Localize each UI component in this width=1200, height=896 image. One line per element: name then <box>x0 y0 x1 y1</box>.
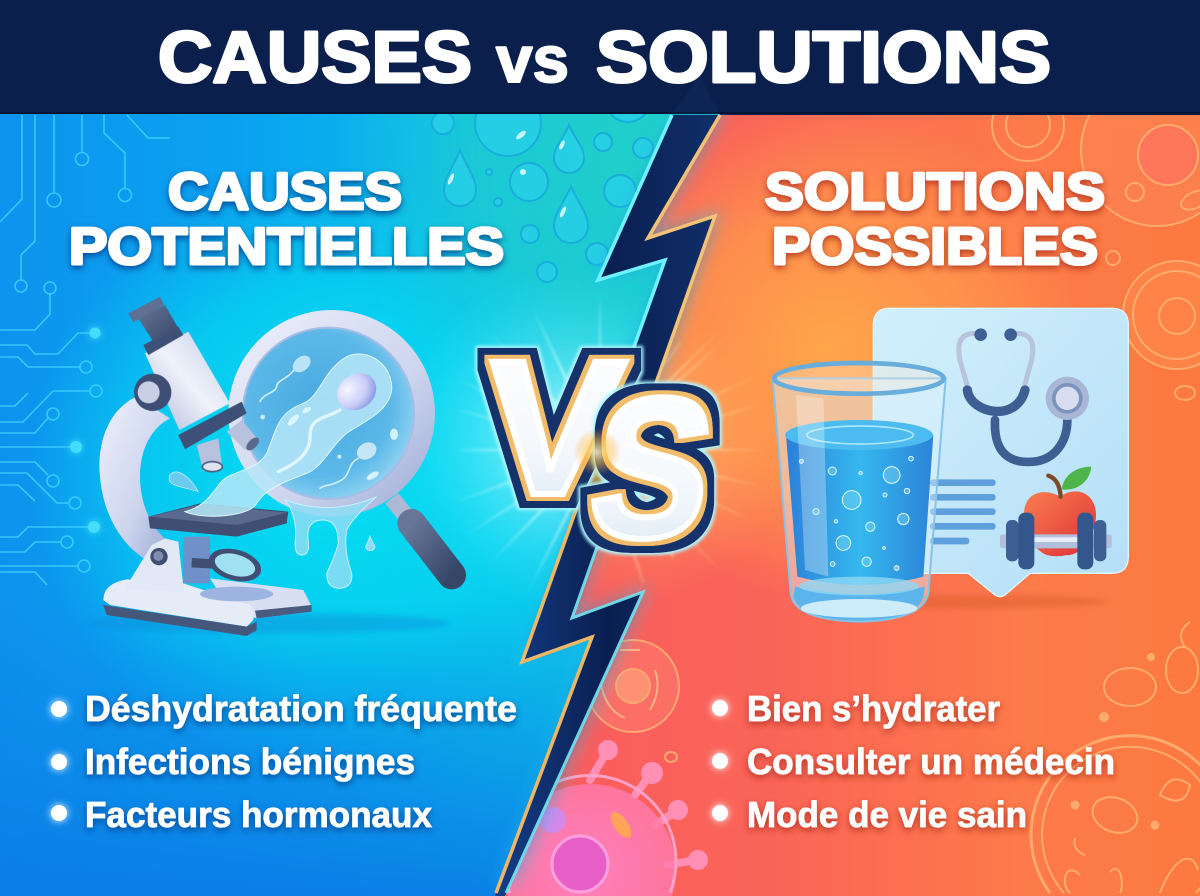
letter V: V <box>477 321 631 535</box>
speech bubble <box>873 308 1128 597</box>
bullet labels <box>85 688 517 835</box>
sperm cells <box>260 352 384 488</box>
circuit pattern <box>0 115 170 585</box>
bullet labels: Bien s’hydrater <box>747 688 1000 729</box>
panel: solutions background <box>480 74 1200 896</box>
list: solutions <box>712 688 1115 835</box>
letter S: S <box>578 357 726 580</box>
virus illustration <box>504 744 704 896</box>
stethoscope <box>959 328 1089 462</box>
magnifier lens <box>228 310 435 517</box>
title: vs <box>496 22 569 96</box>
VS burst rays <box>460 288 760 607</box>
microscope arm <box>99 397 170 560</box>
mirror <box>192 543 265 587</box>
bubbles <box>799 456 913 570</box>
VS emblem <box>477 321 726 580</box>
bullet labels: Infections bénignes <box>85 741 415 782</box>
title: CAUSES <box>158 18 472 98</box>
illustration: microscope and magnifier <box>90 297 452 636</box>
cells pattern <box>587 74 1200 893</box>
bullet labels: Mode de vie sain <box>747 794 1027 835</box>
text lines <box>930 479 996 544</box>
bullet labels: Facteurs hormonaux <box>85 794 432 835</box>
heading: solutions possibles <box>765 163 1105 276</box>
stage <box>148 503 288 537</box>
microscope base <box>103 578 312 636</box>
bullet labels: Déshydratation fréquente <box>85 688 517 729</box>
bullets <box>712 700 728 821</box>
bullet labels: Consulter un médecin <box>747 741 1115 782</box>
mucus strand <box>169 354 398 588</box>
focus knob <box>134 374 171 411</box>
water droplets pattern <box>432 78 653 282</box>
heading: causes potentielles: CAUSES <box>168 163 402 221</box>
magnifier handle <box>392 498 452 575</box>
title <box>158 18 1051 98</box>
title: SOLUTIONS <box>596 18 1051 98</box>
glass of water <box>773 363 946 622</box>
apple <box>1024 467 1096 556</box>
panel: causes background <box>0 110 720 896</box>
microscope tube <box>128 297 261 472</box>
dumbbell <box>1000 513 1112 569</box>
microscope column <box>125 537 210 593</box>
list: causes <box>51 688 517 835</box>
heading: solutions possibles: SOLUTIONS <box>765 163 1105 221</box>
heading: causes potentielles: POTENTIELLES <box>69 218 504 276</box>
bullet labels <box>747 688 1115 835</box>
header bar <box>0 0 1200 114</box>
heading: causes potentielles <box>69 163 504 276</box>
heading: solutions possibles: POSSIBLES <box>772 218 1098 276</box>
bullets <box>51 701 67 821</box>
lightning bolt divider <box>495 115 720 896</box>
illustration: speech bubble, stethoscope, apple, dumbbell, glass of water <box>773 308 1128 622</box>
